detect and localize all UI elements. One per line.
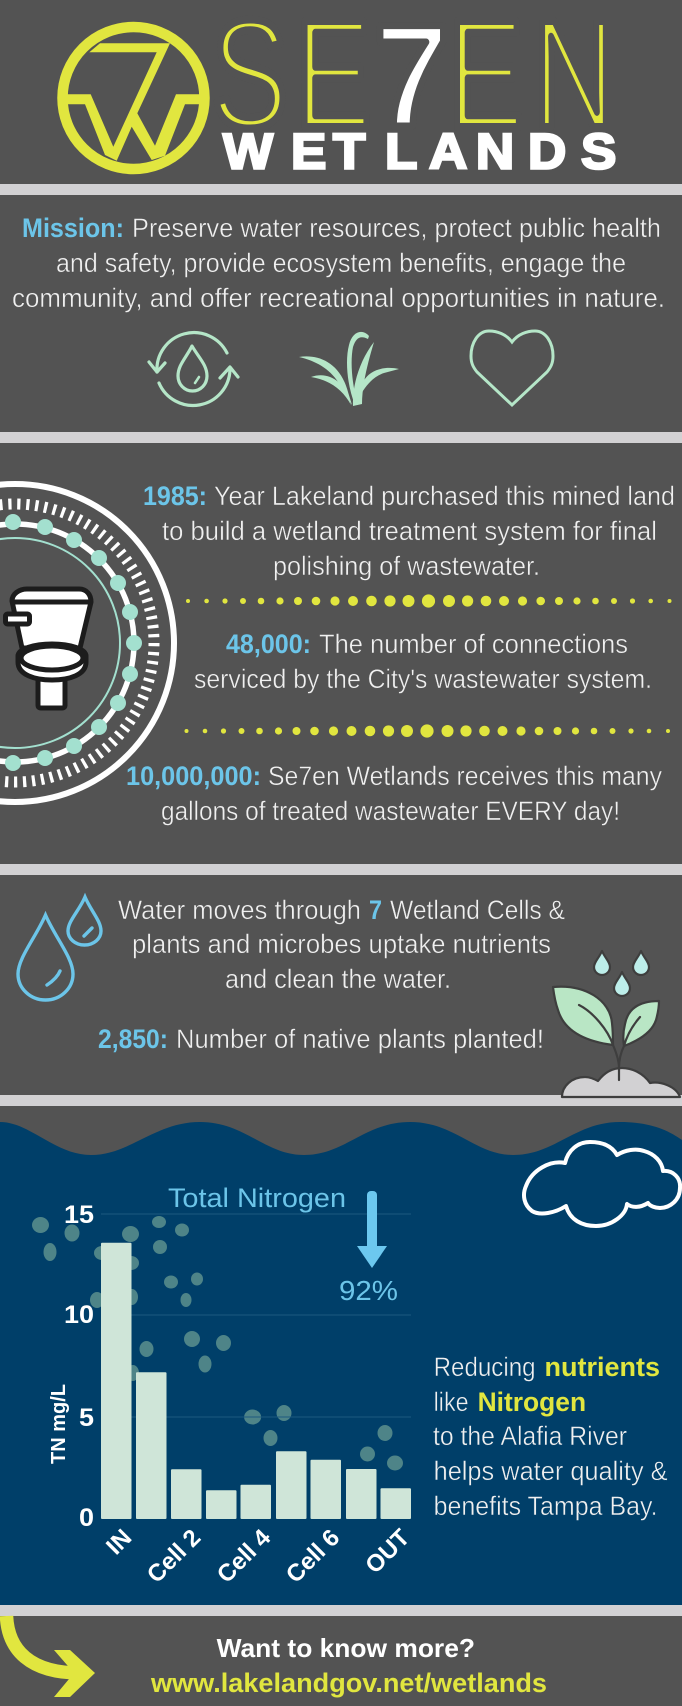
fact: 48,000: serviced by the City's wastewater system.	[194, 664, 652, 694]
bar chart: TN mg/L by cell	[48, 1201, 415, 1589]
text: website link: www.lakelandgov.net/wetlands	[150, 1668, 547, 1698]
panel: total nitrogen water section	[0, 1122, 682, 1605]
title: SE7EN	[212, 0, 615, 160]
fact: 10,000,000	[126, 761, 662, 826]
mission text: and safety, provide ecosystem benefits, engage the	[56, 248, 626, 278]
bar chart: TN mg/L by cell: 5	[79, 1404, 94, 1432]
text: native plants: 2,850:	[98, 1024, 168, 1054]
text: reducing nutrients: nutrients	[544, 1352, 660, 1382]
bar chart: TN mg/L by cell: IN	[101, 1524, 137, 1560]
icon: sprout with rain	[553, 951, 680, 1097]
text: reducing nutrients: like	[434, 1387, 469, 1417]
bar chart: TN mg/L by cell: Cell 6	[281, 1524, 345, 1589]
mission text: Mission:	[22, 213, 124, 243]
fact: 10,000,000: 10,000,000:	[126, 761, 261, 791]
text: reducing nutrients	[433, 1352, 668, 1521]
mission text: Preserve water resources, protect public health	[132, 213, 661, 243]
icon: water cycle	[149, 333, 238, 405]
bar chart: TN mg/L by cell: 10	[64, 1301, 94, 1329]
mission text: community, and offer recreational opportunities in nature.	[12, 283, 665, 313]
icon: seven wetlands roundel	[62, 27, 204, 169]
panel: wetland cells	[18, 895, 680, 1097]
bar chart: TN mg/L by cell: Cell 4	[212, 1524, 277, 1589]
blobs	[32, 1216, 403, 1470]
panel: mission	[12, 213, 665, 406]
label: 92%: 92%	[339, 1275, 398, 1306]
text: wetland cells: and clean the water.	[225, 964, 451, 994]
icon: heart	[471, 331, 553, 405]
panel: wastewater facts	[0, 481, 675, 826]
fact: 1985: to build a wetland treatment system for final	[162, 516, 657, 546]
subtitle: WETLANDS: WETLANDS	[223, 123, 616, 179]
text: reducing nutrients: to the Alafia River	[433, 1421, 627, 1451]
text: reducing nutrients: Reducing	[434, 1352, 536, 1382]
icon: water drops	[18, 897, 101, 1000]
fact: 1985	[143, 481, 675, 581]
text: wetland cells: Water moves through	[118, 895, 361, 925]
text: wetland cells: 7	[369, 895, 382, 925]
fact: 1985: 1985:	[143, 481, 207, 511]
icon: toilet	[6, 589, 91, 708]
text: reducing nutrients: helps water quality &	[434, 1456, 668, 1486]
fact: 48,000: 48,000:	[226, 629, 311, 659]
chart title: Total Nitrogen	[168, 1183, 346, 1213]
text: native plants: Number of native plants planted!	[176, 1024, 544, 1054]
bar chart: TN mg/L by cell: OUT	[360, 1524, 415, 1579]
bar chart: TN mg/L by cell: 0	[79, 1504, 94, 1532]
fact: 48,000	[194, 629, 652, 694]
bar chart: TN mg/L by cell: 15	[64, 1201, 94, 1229]
text: want to know more: Want to know more?	[217, 1633, 475, 1663]
header logo	[62, 0, 616, 179]
text: wetland cells	[118, 895, 565, 994]
fact: 10,000,000: gallons of treated wastewater EVERY day!	[161, 796, 620, 826]
fact: 48,000: The number of connections	[319, 629, 628, 659]
fact: 1985: polishing of wastewater.	[273, 551, 540, 581]
text: wetland cells: plants and microbes uptake nutrients	[132, 929, 551, 959]
panel: more information	[6, 1616, 547, 1698]
icon: cloud	[524, 1142, 680, 1226]
arrow: 92 percent decrease	[357, 1191, 387, 1268]
text: reducing nutrients: Nitrogen	[478, 1387, 586, 1417]
text: wetland cells: Wetland Cells &	[390, 895, 565, 925]
water background with wavy top	[0, 1122, 682, 1605]
text: reducing nutrients: benefits Tampa Bay.	[434, 1491, 658, 1521]
graphic: toilet medallion	[0, 484, 174, 802]
bar chart: TN mg/L by cell: TN mg/L	[48, 1384, 70, 1464]
icon: plant	[299, 332, 399, 406]
mission text	[12, 213, 665, 313]
arrow: curved yellow	[6, 1616, 95, 1697]
bar chart: TN mg/L by cell: Cell 2	[142, 1524, 206, 1589]
